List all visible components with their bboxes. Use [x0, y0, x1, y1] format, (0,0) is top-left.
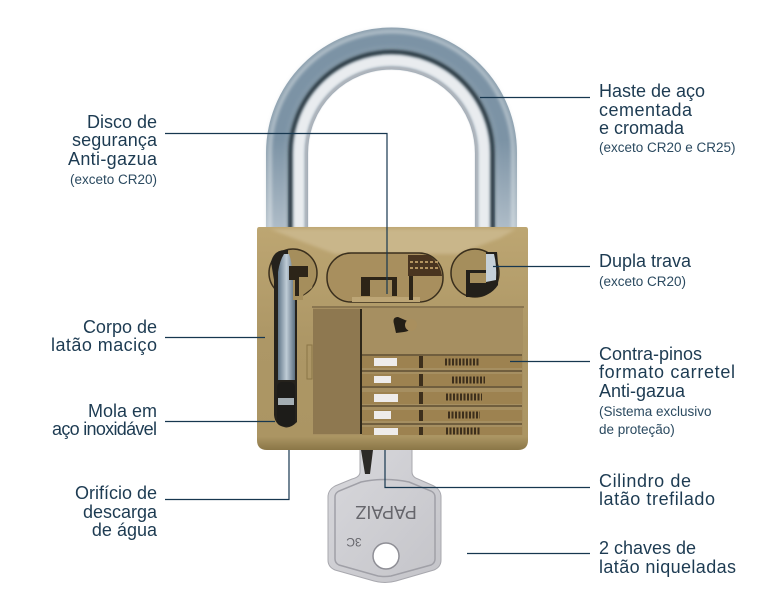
label: mola: Mola em [88, 401, 157, 421]
callout: mola [52, 401, 275, 439]
callout: dupla trava [493, 251, 692, 289]
label: dupla trava: Dupla trava [599, 251, 692, 271]
label: cilindro: Cilindro de [599, 471, 691, 491]
lower cavity [307, 306, 524, 435]
label: haste de aço: cementada [599, 100, 693, 120]
padlock illustration [257, 31, 528, 582]
top bevel [270, 229, 516, 254]
label: contra-pinos: formato carretel [599, 362, 735, 382]
icon: key [328, 448, 441, 582]
label: mola [52, 401, 157, 439]
label: disco de segurança: Disco de [87, 112, 157, 132]
key code: 3C [346, 535, 362, 549]
callout: contra-pinos [510, 344, 735, 437]
label: chaves [599, 538, 736, 577]
label: haste de aço: e cromada [599, 118, 685, 138]
label: contra-pinos [599, 344, 735, 437]
label: disco de segurança: (exceto CR20) [70, 172, 157, 187]
left shackle cavity [269, 249, 317, 427]
label: contra-pinos: (Sistema exclusivo [599, 404, 712, 419]
label: corpo de latão [51, 317, 157, 355]
label: orifício: descarga [83, 502, 158, 522]
lock body [257, 227, 528, 450]
label: dupla trava: (exceto CR20) [599, 274, 686, 289]
label: cilindro [599, 471, 715, 509]
label: cilindro: latão trefilado [599, 489, 715, 509]
label: chaves: latão niqueladas [599, 557, 736, 577]
label: haste de aço: Haste de aço [599, 81, 705, 101]
label: chaves: 2 chaves de [599, 538, 696, 558]
central disc window [327, 253, 443, 302]
label: haste de aço: (exceto CR20 e CR25) [599, 140, 736, 155]
pin rows [362, 355, 522, 435]
label: contra-pinos: de proteção) [599, 422, 675, 437]
label: contra-pinos: Contra-pinos [599, 344, 702, 364]
callout: orifício [75, 450, 289, 540]
shackle [266, 31, 518, 232]
label: dupla trava [599, 251, 692, 289]
label: disco de segurança [68, 112, 158, 187]
label: contra-pinos: Anti-gazua [599, 381, 686, 401]
label: orifício: de água [92, 520, 158, 540]
callout: disco de segurança [68, 112, 387, 294]
right shackle cavity [451, 249, 499, 297]
label: disco de segurança: Anti-gazua [68, 149, 158, 169]
label: haste de aço [599, 81, 736, 155]
callout: corpo de latão [51, 317, 265, 355]
label: orifício [75, 483, 158, 540]
label: corpo de latão: latão maciço [51, 335, 157, 355]
callout: haste de aço [480, 81, 736, 155]
label: orifício: Orifício de [75, 483, 157, 503]
label: disco de segurança: segurança [72, 130, 158, 150]
key brand text: PAPAIZ [355, 502, 417, 522]
callout: chaves [467, 538, 736, 577]
label: mola: aço inoxidável [52, 419, 157, 439]
label: corpo de latão: Corpo de [83, 317, 157, 337]
callout: cilindro [385, 450, 715, 509]
retaining pin [394, 317, 412, 333]
